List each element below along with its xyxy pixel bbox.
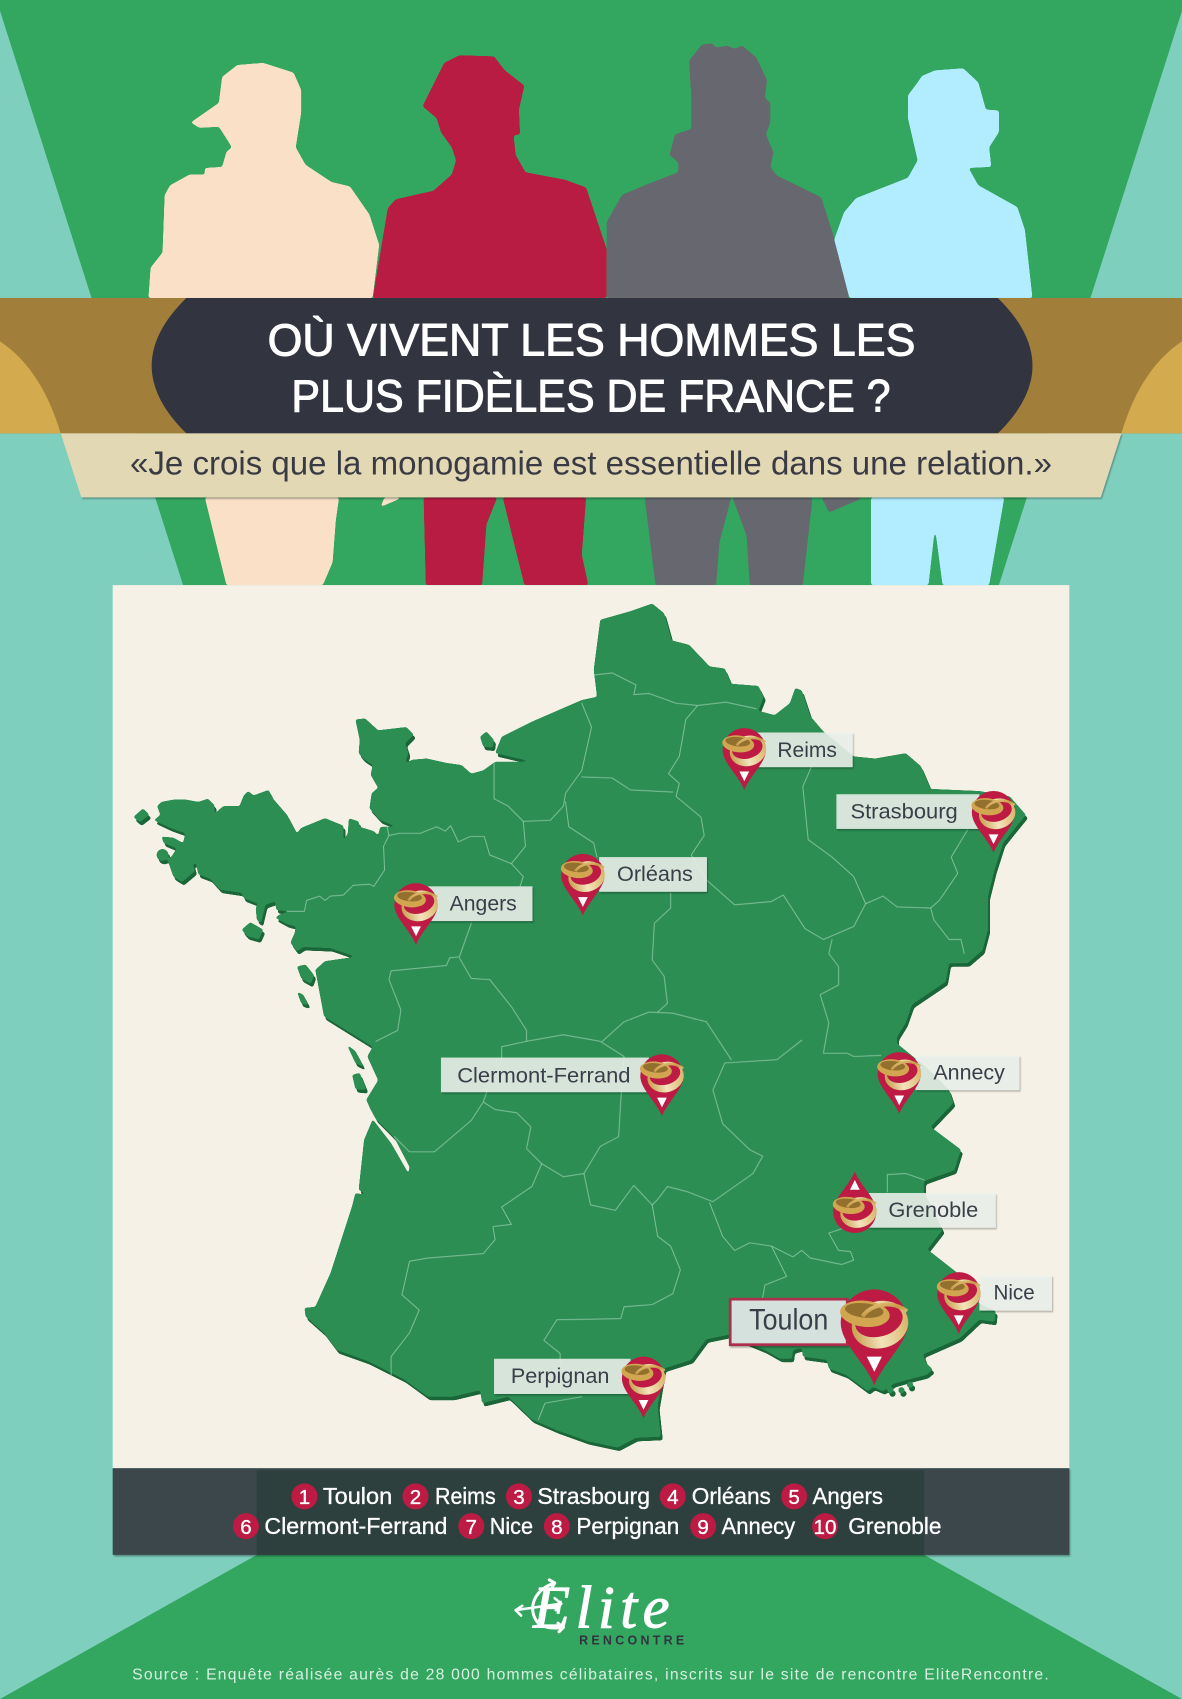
island: Gironde coast (352, 1073, 366, 1090)
label: Grenoble (869, 1193, 996, 1228)
legend row 2: 10 (814, 1516, 836, 1539)
island: Belle-Île (242, 922, 263, 939)
legend row 1 (291, 1483, 883, 1509)
quote: «Je crois que la monogamie est essentielle dans une relation.» (130, 446, 1052, 483)
pin: Annecy (876, 1052, 925, 1114)
label: Orléans (599, 857, 707, 892)
island: Ré (297, 964, 314, 984)
label: Grenoble: Grenoble (888, 1197, 978, 1222)
label: Perpignan: Perpignan (511, 1363, 609, 1388)
pin: Grenoble (inverted) (832, 1171, 880, 1233)
island: Oléron (297, 991, 309, 1006)
label: Toulon (highlighted) (730, 1299, 847, 1345)
title (268, 314, 915, 422)
legend row 2 (233, 1513, 941, 1539)
landmass and islands (133, 604, 1026, 1448)
logo: Elite Rencontre: RENCONTRE (579, 1633, 684, 1647)
label: Reims (753, 732, 853, 767)
label: Annecy (915, 1055, 1019, 1090)
island: Hyères 2 (898, 1387, 905, 1393)
gold curve left (0, 341, 61, 433)
pin: Perpignan (621, 1357, 669, 1418)
pin: Nice (936, 1272, 984, 1334)
label: Nice (979, 1275, 1052, 1311)
logo: Elite Rencontre: Elite (532, 1574, 670, 1641)
label: Nice: Nice (993, 1280, 1035, 1305)
title plate (152, 298, 1032, 433)
pin: Orléans (560, 854, 608, 916)
label: Toulon (highlighted): Toulon (749, 1305, 828, 1337)
legend row 2: Clermont-Ferrand (264, 1513, 447, 1539)
silhouettes (148, 43, 1032, 585)
legend row 1: 1 (299, 1486, 310, 1509)
legend row 1: Angers (813, 1483, 883, 1509)
legend row 2: Annecy (722, 1513, 796, 1539)
pin: Strasbourg (971, 791, 1019, 853)
legend row 1: Reims (435, 1483, 496, 1509)
island: Noirmoutier (347, 1045, 364, 1067)
green light beam: bottom (0, 1555, 1182, 1699)
quote ribbon (61, 433, 1121, 497)
legend row 1: Toulon (323, 1483, 392, 1509)
label: Strasbourg: Strasbourg (850, 799, 958, 824)
legend row 1: 2 (410, 1486, 421, 1509)
region borders (287, 673, 967, 1419)
legend bar (113, 1468, 1069, 1555)
title banner band (0, 298, 1182, 433)
legend row 1: 4 (667, 1486, 679, 1509)
title: OÙ VIVENT LES HOMMES LES (268, 314, 915, 365)
figure 2 crimson (373, 55, 607, 585)
island: Sein (157, 849, 168, 861)
legend row 2: 7 (466, 1516, 477, 1539)
pin: Reims (721, 728, 770, 790)
legend row 2: Nice (490, 1513, 533, 1539)
legend row 1: 3 (513, 1486, 525, 1509)
label: Annecy: Annecy (933, 1060, 1005, 1085)
island: Hyères 1 (907, 1382, 913, 1388)
green light beam: top (0, 0, 1182, 585)
source note: Source : Enquête réalisée aurès de 28 000 hommes célibataires, inscrits sur le site de rencontre EliteRencontre. (132, 1666, 1049, 1683)
legend row 2: Perpignan (576, 1513, 679, 1539)
label: Angers: Angers (450, 891, 517, 916)
label: Clermont-Ferrand: Clermont-Ferrand (457, 1062, 631, 1087)
legend row 1: Strasbourg (537, 1483, 650, 1509)
label: Strasbourg (836, 794, 979, 829)
island: Ouessant (133, 808, 150, 822)
legend row 1: 5 (788, 1486, 800, 1509)
figure 1 peach (148, 63, 403, 585)
island: Jersey (480, 731, 494, 748)
label: Orléans: Orléans (617, 861, 693, 886)
map of France (133, 604, 1026, 1448)
figure 4 light blue (834, 68, 1032, 585)
island: Hyères 3 (887, 1387, 894, 1393)
panel: map (113, 585, 1069, 1468)
label: Perpignan (494, 1359, 631, 1394)
legend row 1: Orléans (692, 1483, 771, 1509)
legend row 2: 6 (240, 1516, 252, 1539)
pin: Clermont-Ferrand (639, 1054, 687, 1116)
legend row 2: Grenoble (848, 1513, 941, 1539)
label: Angers (428, 886, 532, 921)
gold curve right (1121, 341, 1182, 433)
legend row 2: 9 (697, 1516, 709, 1539)
pin: Angers (393, 883, 441, 945)
label: Clermont-Ferrand (441, 1058, 649, 1092)
figure 3 grey (607, 43, 865, 585)
legend row 2: 8 (551, 1516, 563, 1539)
pin: Toulon (large) (839, 1289, 914, 1385)
label: Reims: Reims (777, 737, 837, 762)
title: PLUS FIDÈLES DE FRANCE ? (291, 371, 891, 422)
